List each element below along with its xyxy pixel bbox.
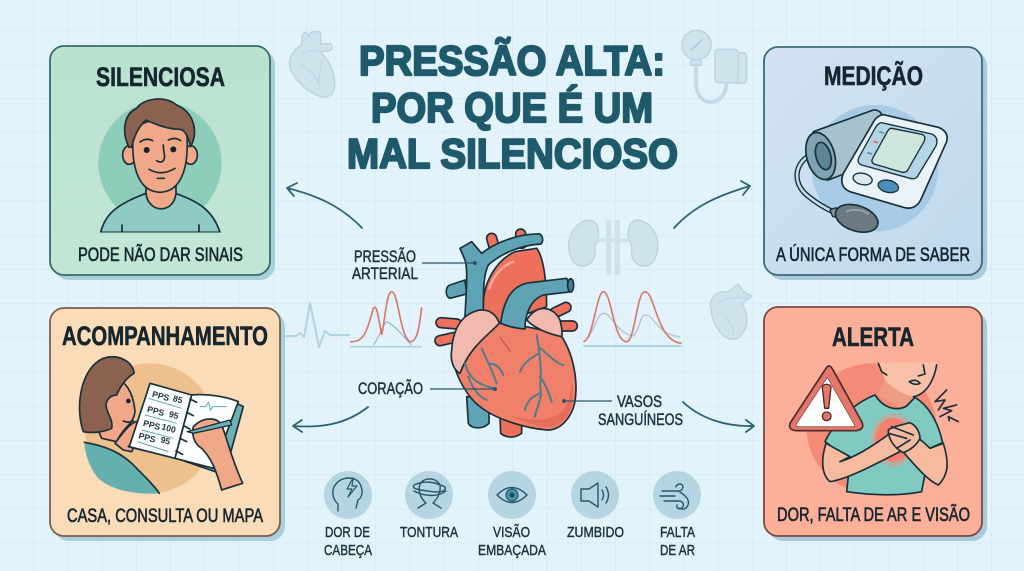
symptom: falta de ar: DE AR: [660, 542, 695, 559]
log entries: PPS: [142, 418, 162, 432]
icon: person writing in a log book: [80, 357, 243, 494]
log entries: 85: [172, 393, 184, 405]
symptom: tontura: TONTURA: [400, 524, 458, 541]
symptom: visão embaçada: [478, 471, 546, 559]
icon: eye: [497, 488, 527, 502]
log entries: PPS: [137, 431, 157, 445]
faint kidneys icon: [569, 220, 658, 275]
icon: chest pain with warning triangle: [790, 363, 958, 495]
label: vasos sanguíneos: [562, 393, 683, 429]
title: POR QUE É UM: [371, 84, 653, 131]
chart: left pressure wave: [350, 292, 422, 347]
central heart illustration: [440, 234, 576, 437]
log entries: 95: [159, 435, 172, 447]
caption: alerta: DOR, FALTA DE AR E VISÃO: [777, 504, 970, 526]
heading: acompanhamento: ACOMPANHAMENTO: [62, 321, 268, 351]
faint blood pressure gauge icon: [682, 30, 747, 102]
icon: blood pressure monitor: [797, 105, 947, 237]
label: pressão arterial: PRESSÃO: [354, 246, 416, 266]
panel: alerta: [764, 307, 987, 541]
chart: right pressure wave: [583, 292, 682, 346]
faint organ icon: [710, 284, 752, 339]
symptom: falta de ar: FALTA: [660, 524, 695, 541]
label: coração: [358, 378, 497, 398]
symptom: falta de ar: [653, 471, 701, 559]
caption: silenciosa: PODE NÃO DAR SINAIS: [78, 244, 243, 266]
icon: speaker: [581, 483, 598, 507]
panel: medição: [764, 47, 987, 280]
log entries: [137, 389, 184, 447]
label: pressão arterial: ARTERIAL: [352, 265, 418, 283]
arrow: to acompanhamento: [293, 407, 368, 432]
faint heart icon: [289, 31, 335, 97]
symptom: tontura: [400, 471, 458, 541]
log entries: 100: [160, 422, 177, 435]
arrow: to medição: [674, 181, 750, 228]
icon: wind: [660, 484, 689, 509]
arrow: to silenciosa: [287, 183, 362, 228]
heading: silenciosa: SILENCIOSA: [96, 62, 225, 92]
icon: calm person: [98, 99, 222, 233]
symptom: dor de cabeça: [324, 471, 372, 559]
caption: acompanhamento: CASA, CONSULTA OU MAPA: [67, 506, 263, 527]
label: pressão arterial: [352, 246, 477, 283]
arrow: to alerta: [683, 402, 754, 432]
panel: acompanhamento: [50, 308, 285, 541]
title: PRESSÃO ALTA:: [359, 37, 665, 84]
label: vasos sanguíneos: SANGUÍNEOS: [598, 410, 683, 429]
log entries: PPS: [146, 404, 166, 418]
caption: medição: A ÚNICA FORMA DE SABER: [776, 244, 970, 266]
symptom: dor de cabeça: CABEÇA: [324, 542, 372, 559]
icon: dizzy head: [413, 479, 446, 508]
log entries: 95: [168, 409, 180, 421]
title: MAL SILENCIOSO: [347, 130, 678, 177]
symptom: dor de cabeça: DOR DE: [325, 524, 370, 541]
label: coração: CORAÇÃO: [358, 378, 423, 398]
symptom: visão embaçada: VISÃO: [493, 524, 530, 541]
log entries: PPS: [151, 389, 171, 403]
label: vasos sanguíneos: VASOS: [617, 393, 662, 411]
heading: alerta: ALERTA: [832, 322, 914, 352]
heading: medição: MEDIÇÃO: [824, 60, 923, 91]
title: [347, 37, 678, 177]
symptom: visão embaçada: EMBAÇADA: [478, 542, 546, 559]
panel: silenciosa: [50, 46, 275, 280]
faint ECG line: [284, 303, 350, 347]
symptom: zumbido: [567, 471, 624, 541]
icon: head with lightning: [333, 478, 362, 511]
symptom: zumbido: ZUMBIDO: [567, 524, 624, 541]
